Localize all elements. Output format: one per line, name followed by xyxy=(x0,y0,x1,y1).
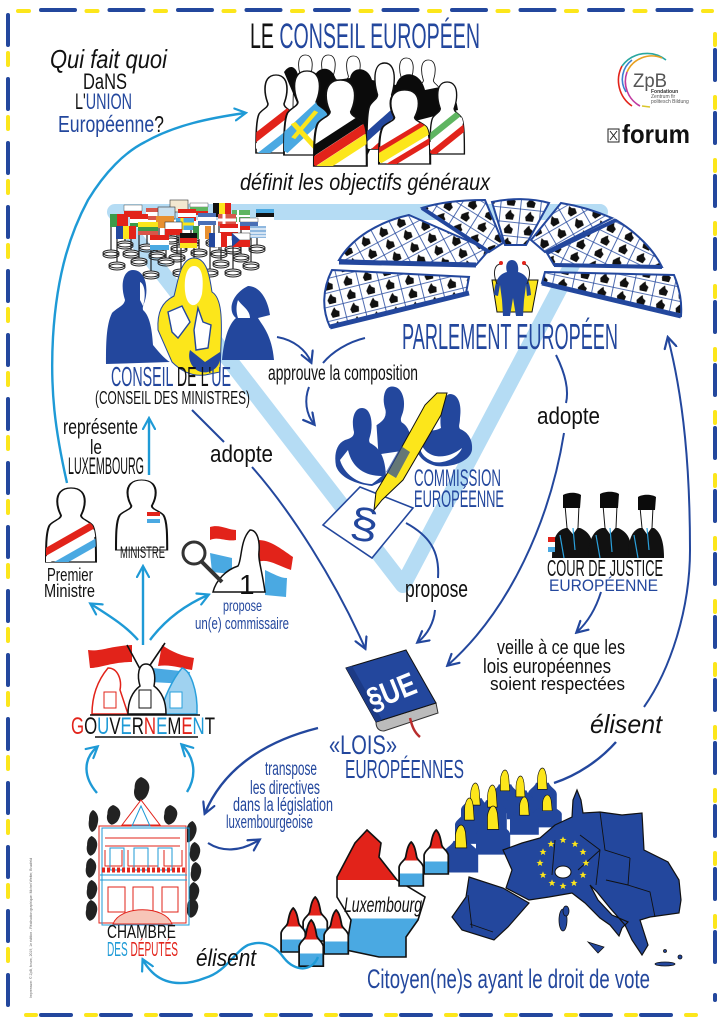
label: conseil de l'UE: (CONSEIL DES MINISTRES) xyxy=(95,388,250,408)
arrows: government appoints xyxy=(91,567,208,645)
text: transpose les directives: dans la législation xyxy=(233,795,333,816)
arrow: council of EU to adopte xyxy=(192,410,224,442)
logo: ZpB Fondation: Fondatioun xyxy=(651,89,678,95)
illustration: European Parliament hemicycle xyxy=(324,199,681,327)
wedge: centre xyxy=(492,199,549,245)
text: transpose les directives: luxembourgeoise xyxy=(226,812,313,832)
label: commission européenne: COMMISSION xyxy=(414,465,501,492)
arrow: Luxembourg voters elect chamber xyxy=(143,943,318,983)
country borders xyxy=(468,812,655,932)
arrow: transposition from laws to chamber xyxy=(205,728,318,813)
lectern xyxy=(492,280,538,312)
label: ministre: MINISTRE xyxy=(120,543,165,562)
logo: forum: forum xyxy=(622,119,690,149)
illustration: Chamber of Deputies building xyxy=(86,777,201,925)
Mediterranean islands xyxy=(559,906,682,966)
wedge: top left xyxy=(422,200,503,252)
text: représente le Luxembourg xyxy=(63,416,144,480)
text: représente le Luxembourg: le xyxy=(90,437,102,459)
label: conseil de l'UE xyxy=(95,361,250,408)
label: conseil de l'UE: CONSEIL DE L'UE xyxy=(111,361,231,392)
figure: Sweden sash xyxy=(283,70,328,156)
label: lois européennes: «LOIS» xyxy=(329,730,397,760)
illustration: European Court of Justice judges xyxy=(548,492,664,558)
label: lois européennes xyxy=(329,730,464,784)
document with paragraph sign xyxy=(323,487,413,558)
label: propose un(e) commissaire xyxy=(195,598,289,633)
microphones xyxy=(494,264,530,284)
illustration: commissioner proposal with flags and magnifier: 1 xyxy=(239,569,255,600)
text: veille à ce que les lois xyxy=(483,637,625,694)
illustration: prime minister with sash xyxy=(45,487,97,563)
label: premier ministre: Ministre xyxy=(44,581,95,601)
person: left minister xyxy=(106,270,170,364)
heading: qui fait quoi: DaNS xyxy=(83,69,127,94)
wedge: top right xyxy=(531,203,612,252)
arrow: small curve under text xyxy=(208,840,259,849)
text: veille à ce que les lois: lois européennes xyxy=(483,656,611,678)
arrow: citizens elect parliament xyxy=(644,338,690,707)
text: veille à ce que les lois: soient respectées xyxy=(490,674,625,694)
label: premier ministre xyxy=(44,565,95,601)
illustration: book of EU laws xyxy=(346,650,438,737)
caption: définit les objectifs généraux: définit les objectifs généraux xyxy=(240,169,491,195)
illustration: map of Europe xyxy=(452,790,682,966)
heading: qui fait quoi xyxy=(50,44,168,137)
black silhouettes of deputies around the building xyxy=(86,777,201,921)
label: gouvernement: GOUVERNEMENT xyxy=(71,713,215,740)
text: transpose les directives: les directives xyxy=(250,778,320,799)
logo: ZpB Fondation: politesch Bildung xyxy=(651,99,689,105)
label: commission européenne xyxy=(414,465,504,513)
title: le conseil européen: LE CONSEIL EUROPÉEN xyxy=(250,17,480,56)
label: premier ministre: Premier xyxy=(47,565,93,585)
arrow: adopte to laws xyxy=(252,467,365,648)
label: cour de justice européenne: EUROPÉENNE xyxy=(549,576,658,595)
text: élisent right: élisent xyxy=(590,709,664,739)
arrows: chamber to government xyxy=(86,745,193,793)
figure: Italy sash xyxy=(429,81,466,155)
illustration: Luxembourg voters near map xyxy=(281,830,448,966)
arrow: parliament approves xyxy=(323,338,365,363)
light blue triangle linking the institutions xyxy=(115,212,600,585)
arrow: adopte right to laws xyxy=(448,433,564,665)
EU stars xyxy=(536,836,590,889)
arrow: propose to laws xyxy=(418,610,435,642)
wedge: lower right xyxy=(542,272,681,316)
arrow: commission document to propose xyxy=(406,523,438,578)
illustration: government flags and members xyxy=(88,643,200,715)
heading: qui fait quoi: Européenne? xyxy=(58,111,164,137)
text: représente le Luxembourg: représente xyxy=(63,416,138,439)
arrow: court to text xyxy=(577,592,601,632)
figure: France sash xyxy=(367,62,395,150)
illustration: Luxembourg map xyxy=(337,830,425,957)
label: propose un(e) commissaire: un(e) commissaire xyxy=(195,614,289,633)
wedge: upper right xyxy=(547,220,662,267)
heading: qui fait quoi: Qui fait quoi xyxy=(50,44,168,74)
text: veille à ce que les lois: veille à ce que les xyxy=(497,637,625,659)
text: approuve la composition: approuve la composition xyxy=(268,362,418,385)
label: chambre des députés: CHAMBRE xyxy=(107,922,176,942)
illustration: Council of the EU ministers xyxy=(106,258,274,375)
person: right minister xyxy=(222,286,274,360)
label: commission européenne: EUROPÉENNE xyxy=(414,486,504,513)
wedge: upper left xyxy=(339,215,489,265)
logo: ZpB Fondation: ZpB xyxy=(633,71,667,92)
text: LUXEMBOURG xyxy=(68,453,144,480)
arrow: Luxembourg prime minister to European Council xyxy=(52,113,245,483)
arrow: minister up to council xyxy=(148,419,150,475)
label: chambre des députés xyxy=(107,922,178,961)
illustration: book of EU laws: §UE xyxy=(362,665,421,717)
heading: qui fait quoi: L'UNION xyxy=(75,89,132,114)
label: Luxembourg: Luxembourg xyxy=(344,894,422,917)
illustration: European Commission members with pen xyxy=(323,386,472,558)
logo: ZpB Fondation: Zentrum fir xyxy=(651,94,676,100)
credits: vertical imprint: Impressum: © ZpB, forum, 2019, 1e édition - Réalisation graphique: Michel Welter, Bruxfeld xyxy=(29,858,33,998)
president xyxy=(494,260,531,316)
person: central yellow presiding minister xyxy=(158,258,221,375)
text: transpose les directives: transpose xyxy=(265,759,317,780)
illustration: minister xyxy=(116,480,167,550)
illustration: European voters with yellow heads xyxy=(444,768,562,873)
illustration: European Commission members with pen: § xyxy=(347,498,381,549)
arrow: parliament to adopte xyxy=(556,355,567,403)
line: citizens to élisent xyxy=(554,742,616,783)
text: adopte left: adopte xyxy=(210,441,273,468)
text: transpose les directives xyxy=(226,759,333,832)
label: propose un(e) commissaire: propose xyxy=(223,598,262,615)
logo: ZpB Fondation xyxy=(618,53,689,107)
text: adopte right: adopte xyxy=(537,403,600,430)
arrow: to commission xyxy=(306,387,314,424)
label: chambre des députés: DES DÉPUTÉS xyxy=(107,938,178,961)
wedge: lower left xyxy=(324,270,469,327)
label: lois européennes: EUROPÉENNES xyxy=(345,754,464,784)
figure: Luxembourg sash xyxy=(255,74,290,154)
Switzerland gap xyxy=(555,866,571,878)
flags of member states xyxy=(103,200,274,279)
illustration: commissioner proposal with flags and magnifier xyxy=(183,526,293,600)
figure: Germany sash xyxy=(312,79,368,167)
label: cour de justice européenne xyxy=(547,555,663,595)
arrow: council of EU approves xyxy=(277,337,311,362)
text: élisent left: élisent xyxy=(196,945,257,972)
figure: Spain sash xyxy=(378,90,432,165)
text: propose: propose xyxy=(405,576,468,603)
yellow pen xyxy=(374,393,447,510)
illustration: European Council leaders with national sashes xyxy=(251,55,476,171)
